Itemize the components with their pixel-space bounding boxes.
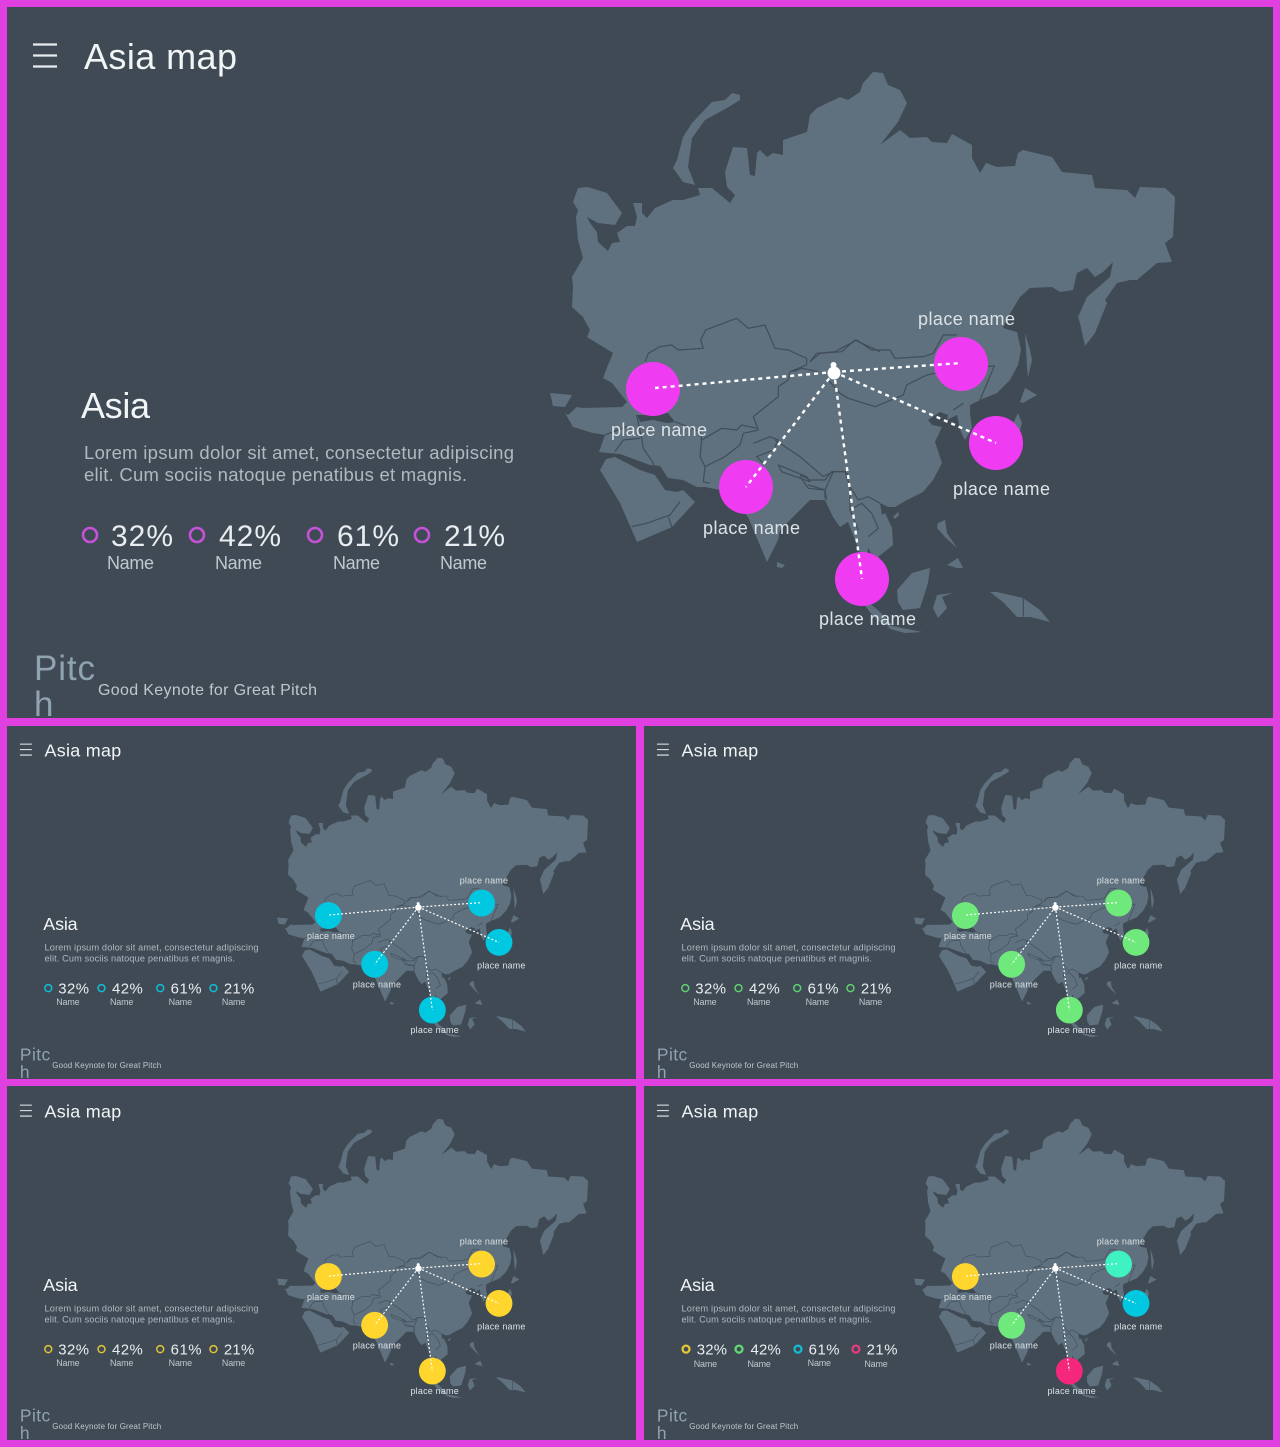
map: Asia landmass xyxy=(277,1119,588,1398)
stat row: Name xyxy=(808,1358,831,1368)
stat row: Name xyxy=(215,553,262,573)
icon: hamburger menu xyxy=(33,44,57,66)
brand footer xyxy=(657,1405,798,1443)
place labels: place name xyxy=(353,980,401,990)
stat row: 61% xyxy=(171,981,202,998)
body text: elit. Cum sociis natoque penatibus et magnis. xyxy=(45,1314,235,1324)
brand footer: Good Keynote for Great Pitch xyxy=(52,1422,161,1431)
brand footer: Good Keynote for Great Pitch xyxy=(689,1422,798,1431)
body text xyxy=(45,942,258,963)
brand footer xyxy=(20,1044,161,1082)
place labels: place name xyxy=(1097,876,1145,886)
stat row: Name xyxy=(110,997,133,1007)
place labels xyxy=(307,876,525,1035)
stat row: Name xyxy=(107,553,154,573)
place labels: place name xyxy=(1047,1386,1096,1396)
title: Asia map xyxy=(682,740,758,760)
brand footer: Pitc xyxy=(20,1044,51,1064)
stat row xyxy=(682,981,891,1007)
heading: Asia: Asia xyxy=(680,914,715,934)
stat row: 21% xyxy=(861,981,891,998)
stat row: Name xyxy=(859,997,882,1007)
place labels: place name xyxy=(819,609,916,629)
body text: Lorem ipsum dolor sit amet, consectetur adipiscing xyxy=(682,1303,895,1313)
title: Asia map xyxy=(84,36,237,77)
icon: hamburger menu xyxy=(20,1105,32,1116)
place labels: place name xyxy=(410,1025,459,1035)
title: Asia map xyxy=(45,1101,121,1121)
place labels: place name xyxy=(918,309,1015,329)
stat row: Name xyxy=(747,997,770,1007)
body text: elit. Cum sociis natoque penatibus et magnis. xyxy=(84,464,467,485)
brand footer: h xyxy=(34,685,53,724)
place labels: place name xyxy=(410,1386,459,1396)
stat row: Name xyxy=(169,997,192,1007)
place labels: place name xyxy=(1114,1321,1162,1331)
place labels: place name xyxy=(1114,960,1162,970)
brand footer: Good Keynote for Great Pitch xyxy=(52,1061,161,1070)
stat row: 61% xyxy=(809,1342,840,1359)
body text: elit. Cum sociis natoque penatibus et magnis. xyxy=(45,953,235,963)
place labels: place name xyxy=(460,1237,508,1247)
map markers and routes xyxy=(315,1251,512,1384)
stat row: Name xyxy=(806,997,829,1007)
brand footer: Good Keynote for Great Pitch xyxy=(689,1061,798,1070)
stat row: Name xyxy=(864,1359,888,1369)
place labels xyxy=(307,1237,525,1396)
stat row: 32% xyxy=(695,981,726,998)
stat row: 42% xyxy=(112,981,143,998)
place labels: place name xyxy=(477,1321,525,1331)
stat row xyxy=(45,1342,254,1368)
brand footer: h xyxy=(657,1423,667,1443)
stat row: 42% xyxy=(219,520,281,553)
stat row: 21% xyxy=(224,981,254,998)
icon: hamburger menu xyxy=(20,744,32,755)
body text: Lorem ipsum dolor sit amet, consectetur adipiscing xyxy=(45,942,258,952)
panel: green variant xyxy=(657,740,1225,1082)
place labels xyxy=(944,876,1162,1035)
stat row: 32% xyxy=(58,981,89,998)
stat row: 42% xyxy=(749,981,780,998)
icon: hamburger menu xyxy=(657,1105,669,1116)
place labels: place name xyxy=(703,518,800,538)
place labels: place name xyxy=(477,960,525,970)
stat row: Name xyxy=(333,553,380,573)
heading: Asia: Asia xyxy=(680,1275,715,1295)
icon: hamburger menu xyxy=(657,744,669,755)
place labels: place name xyxy=(353,1341,401,1351)
map: Asia landmass xyxy=(914,758,1225,1037)
brand footer xyxy=(657,1044,798,1082)
brand footer xyxy=(20,1405,161,1443)
stat row: 61% xyxy=(808,981,839,998)
place labels: place name xyxy=(990,980,1038,990)
place labels: place name xyxy=(944,1292,992,1302)
stat row: Name xyxy=(222,997,245,1007)
place labels: place name xyxy=(1097,1237,1145,1247)
stat row: Name xyxy=(694,1359,717,1369)
place labels: place name xyxy=(990,1341,1038,1351)
brand footer: h xyxy=(20,1062,30,1082)
brand footer: Pitc xyxy=(20,1405,51,1425)
stat row: Name xyxy=(169,1358,192,1368)
place labels: place name xyxy=(944,931,992,941)
panel: yellow variant xyxy=(20,1101,588,1443)
stat row: Name xyxy=(747,1359,771,1369)
heading: Asia: Asia xyxy=(81,385,151,426)
place labels xyxy=(944,1237,1162,1396)
place labels xyxy=(611,309,1050,629)
map markers and routes xyxy=(952,1251,1149,1384)
stat row: Name xyxy=(56,1358,80,1368)
stat row: 21% xyxy=(444,520,505,553)
panel: cyan variant xyxy=(20,740,588,1082)
body text: Lorem ipsum dolor sit amet, consectetur adipiscing xyxy=(682,942,895,952)
place labels: place name xyxy=(611,420,707,440)
stat row xyxy=(83,520,505,573)
body text: elit. Cum sociis natoque penatibus et magnis. xyxy=(682,953,872,963)
body text xyxy=(682,1303,895,1324)
title: Asia map xyxy=(682,1101,758,1121)
stat row: Name xyxy=(110,1358,133,1368)
map: Asia landmass xyxy=(550,72,1175,633)
place labels: place name xyxy=(307,931,355,941)
stat row: 61% xyxy=(337,520,399,553)
place labels: place name xyxy=(307,1292,355,1302)
stat row: Name xyxy=(222,1358,245,1368)
map markers and routes xyxy=(315,890,512,1023)
panel: main Asia map in magenta xyxy=(33,36,1175,724)
stat row: 32% xyxy=(697,1342,727,1359)
brand footer: Good Keynote for Great Pitch xyxy=(98,682,317,699)
place labels: place name xyxy=(1047,1025,1096,1035)
brand footer: h xyxy=(20,1423,30,1443)
brand footer xyxy=(34,649,317,724)
map markers and routes xyxy=(626,337,1023,606)
stat row xyxy=(45,981,254,1007)
brand footer: Pitc xyxy=(657,1405,688,1425)
stat row: Name xyxy=(693,997,717,1007)
body text: Lorem ipsum dolor sit amet, consectetur adipiscing xyxy=(84,442,514,463)
stat row: 61% xyxy=(171,1342,202,1359)
panel: multicolour variant xyxy=(657,1101,1225,1443)
map: Asia landmass xyxy=(914,1119,1225,1398)
heading: Asia: Asia xyxy=(43,914,78,934)
stat row xyxy=(683,1342,897,1369)
stat row: 42% xyxy=(112,1342,143,1359)
body text: elit. Cum sociis natoque penatibus et magnis. xyxy=(682,1314,872,1324)
stat row: 21% xyxy=(224,1342,254,1359)
heading: Asia: Asia xyxy=(43,1275,78,1295)
body text xyxy=(45,1303,258,1324)
place labels: place name xyxy=(953,479,1050,499)
brand footer: Pitc xyxy=(657,1044,688,1064)
body text: Lorem ipsum dolor sit amet, consectetur adipiscing xyxy=(45,1303,258,1313)
stat row: Name xyxy=(56,997,80,1007)
stat row: 42% xyxy=(750,1342,781,1359)
stat row: Name xyxy=(440,553,487,573)
map: Asia landmass xyxy=(277,758,588,1037)
body text xyxy=(682,942,895,963)
brand footer: h xyxy=(657,1062,667,1082)
body text xyxy=(84,442,514,485)
stat row: 32% xyxy=(58,1342,89,1359)
place labels: place name xyxy=(460,876,508,886)
stat row: 21% xyxy=(867,1342,897,1359)
title: Asia map xyxy=(45,740,121,760)
stat row: 32% xyxy=(111,520,173,553)
map markers and routes xyxy=(952,890,1149,1023)
brand footer: Pitc xyxy=(34,649,95,688)
